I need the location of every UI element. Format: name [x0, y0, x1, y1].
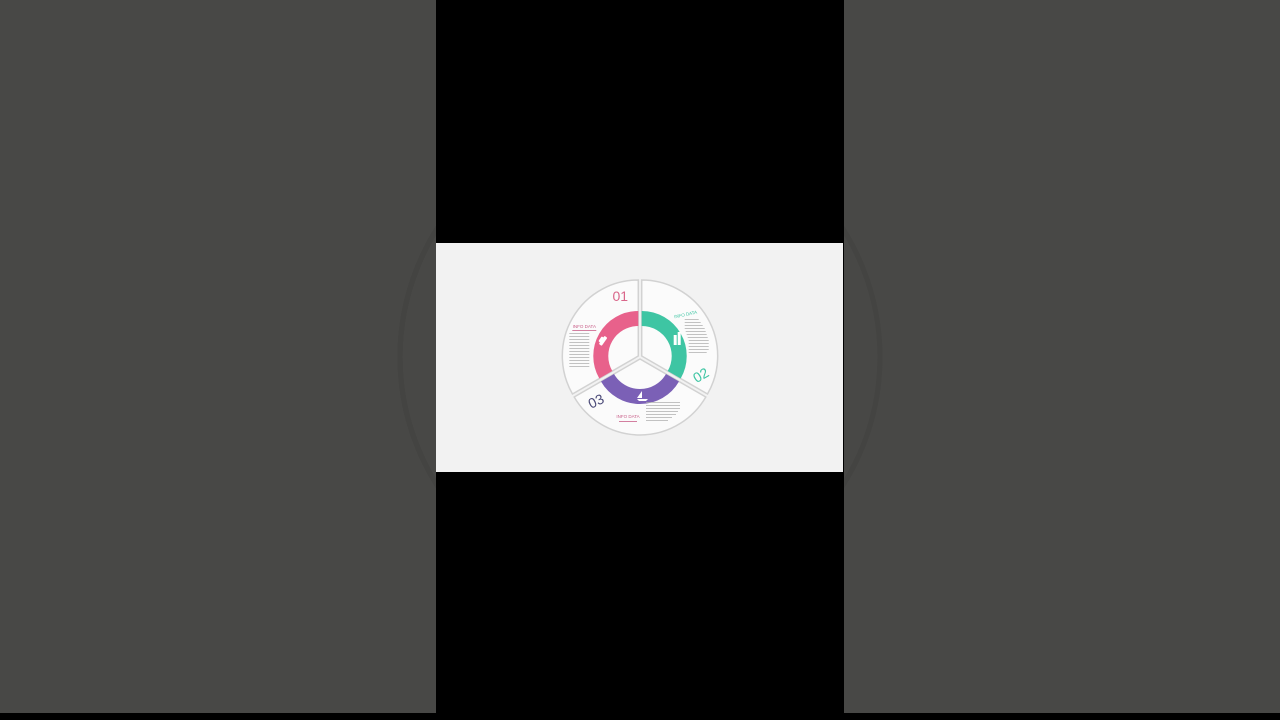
blurred background left: [0, 0, 880, 713]
slide panel: [436, 243, 843, 472]
label teal: INFO DATA: [674, 310, 698, 319]
ring arc purple: [608, 378, 672, 397]
sector 02 teal: [642, 280, 718, 394]
label pink: INFO DATA: [573, 324, 596, 329]
sector 01 pink: [562, 280, 638, 394]
icon car: [597, 335, 607, 346]
label purple: INFO DATA: [616, 414, 640, 419]
number 02: 02: [690, 364, 712, 386]
icon buildings: [674, 332, 681, 345]
blurred background right: [400, 0, 1280, 713]
number 01: 01: [613, 288, 628, 304]
sector 03 purple: [574, 359, 706, 435]
icon sailboat: [637, 391, 648, 401]
number 03: 03: [586, 390, 607, 412]
ring arc teal: [642, 318, 679, 375]
ring arc pink: [601, 318, 638, 375]
